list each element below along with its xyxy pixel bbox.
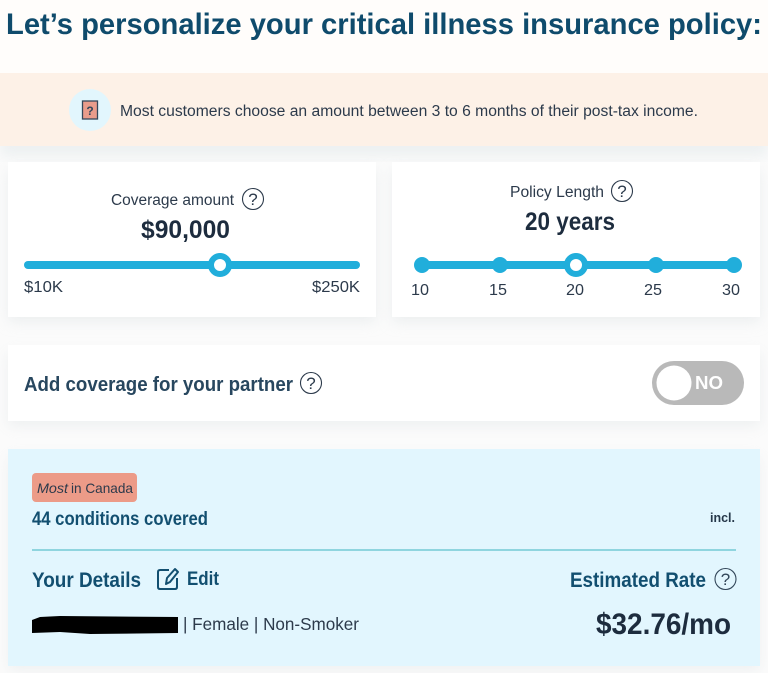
slider tick labels: 30 [722, 282, 740, 299]
icon: help: ? [617, 182, 627, 201]
policy label: Policy Length [510, 184, 604, 201]
icon: help: ? [721, 570, 730, 589]
panel: quote summary [8, 449, 760, 671]
title: Let’s personalize your critical illness insurance policy: [6, 8, 762, 41]
icon: edit [158, 569, 178, 589]
panel: advice banner [0, 73, 768, 156]
panel: coverage amount [8, 162, 376, 322]
icon: help: ? [248, 190, 258, 209]
badge: in Canada [71, 480, 133, 496]
icon: help [242, 188, 264, 210]
icon: help: ? [306, 374, 316, 393]
slider min label: $10K [24, 279, 63, 296]
banner text: Most customers choose an amount between 3 to 6 months of their post-tax income. [120, 103, 698, 120]
slider tick labels: 25 [644, 282, 662, 299]
applicant details: | Female | Non-Smoker [183, 614, 359, 634]
coverage value: $90,000 [141, 216, 230, 244]
icon: help [612, 180, 632, 202]
coverage slider [24, 256, 360, 274]
estimated rate value: $32.76/mo [596, 608, 731, 641]
panel: policy length [392, 162, 760, 322]
partner label: Add coverage for your partner [24, 374, 293, 396]
slider tick labels: 15 [489, 282, 507, 299]
icon: help [300, 372, 322, 394]
panel: partner coverage [8, 345, 760, 426]
slider tick labels: 20 [566, 282, 584, 299]
badge: Most [37, 480, 69, 496]
redacted name [32, 616, 178, 634]
badge [32, 473, 137, 502]
slider tick labels [411, 282, 740, 299]
conditions covered: 44 conditions covered [32, 509, 208, 530]
policy slider [414, 256, 742, 274]
estimated rate label: Estimated Rate [570, 569, 706, 592]
incl note: incl. [710, 510, 735, 525]
toggle [652, 361, 744, 405]
icon: question card: ? [86, 104, 94, 118]
icon: question card [69, 89, 111, 131]
slider max label: $250K [312, 279, 360, 296]
edit link: Edit [187, 569, 220, 590]
toggle: NO [695, 373, 723, 393]
slider tick labels: 10 [411, 282, 429, 299]
icon: help [715, 568, 736, 590]
policy value: 20 years [525, 208, 615, 236]
your details heading: Your Details [32, 569, 141, 592]
coverage label: Coverage amount [111, 192, 235, 209]
